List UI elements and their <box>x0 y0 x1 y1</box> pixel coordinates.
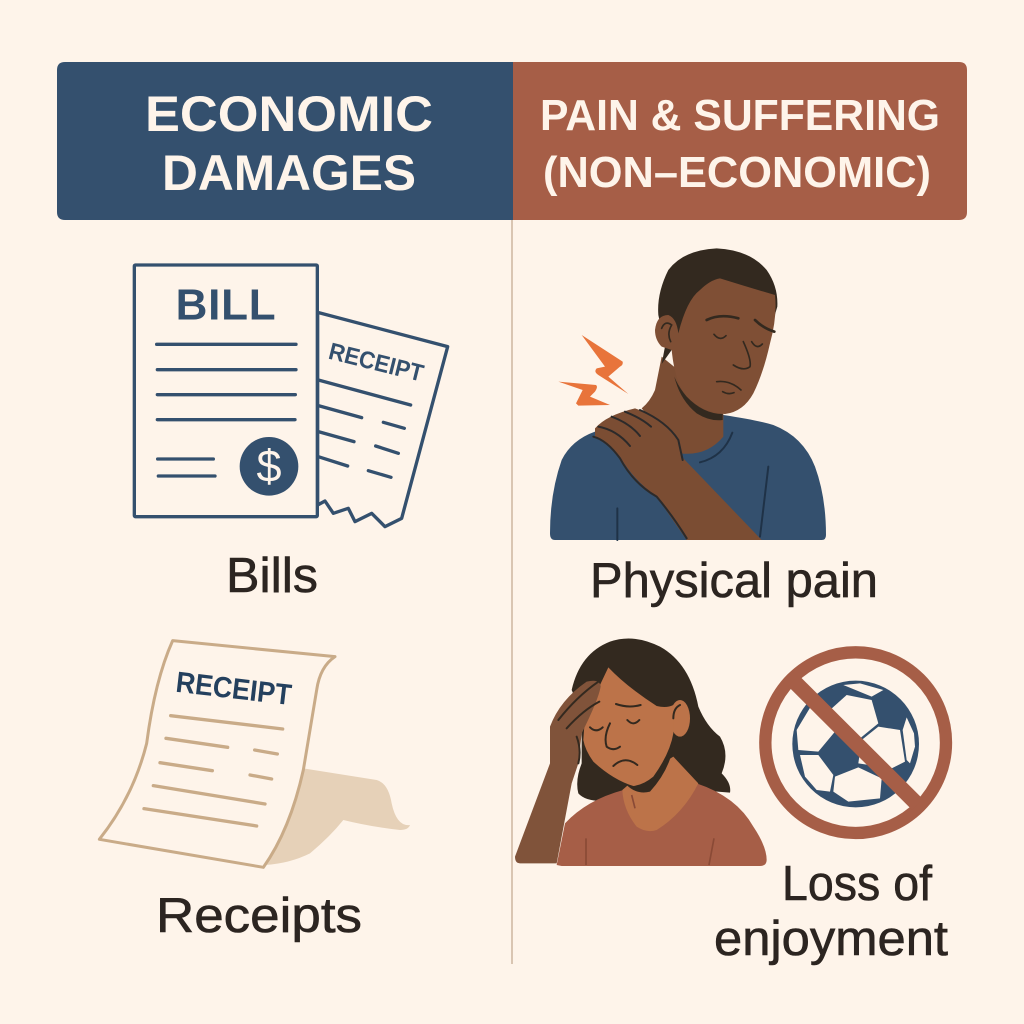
man's chin shadow <box>674 377 723 420</box>
label: physical pain: Physical pain <box>590 554 878 608</box>
woman's features and fingers <box>558 682 680 766</box>
soccer ball <box>792 681 919 807</box>
man's arm and hand <box>595 408 762 540</box>
label: loss of enjoyment: enjoyment <box>714 912 948 966</box>
icon: bill sheet: BILL <box>176 280 276 329</box>
label: bills: Bills <box>226 549 318 603</box>
label: loss of enjoyment <box>714 857 948 966</box>
icon: bill sheet <box>134 265 317 517</box>
label: loss of enjoyment: Loss of <box>782 857 932 911</box>
icon: back receipt <box>318 312 448 527</box>
icon: no soccer ball <box>765 652 946 833</box>
icon: woman with headache <box>515 638 767 866</box>
header: pain and suffering: PAIN & SUFFERING <box>540 91 940 140</box>
woman's shirt lines <box>586 795 714 865</box>
woman's arm and hand <box>515 681 601 863</box>
icon: back receipt: RECEIPT <box>326 338 427 388</box>
receipt title: RECEIPT <box>174 666 293 712</box>
woman's ear <box>670 700 690 737</box>
icon: bill sheet: $ <box>256 441 282 492</box>
woman's face <box>583 667 673 786</box>
man's facial features <box>707 316 774 332</box>
header: pain and suffering <box>513 62 967 220</box>
woman's shirt <box>557 782 767 866</box>
arm outlines and fingers <box>593 410 687 538</box>
man's shirt <box>550 413 826 540</box>
receipt sheet <box>99 641 335 867</box>
icon: pain bolts <box>558 335 628 406</box>
prohibition ring and bar <box>765 652 946 833</box>
label: receipts: Receipts <box>156 889 362 943</box>
header: pain and suffering: (NON–ECONOMIC) <box>543 148 931 197</box>
icon: bill and receipt <box>134 265 448 527</box>
header: economic damages: ECONOMIC <box>145 86 433 142</box>
icon: curled receipt <box>99 641 410 867</box>
icon: man with shoulder pain <box>550 248 826 540</box>
woman's chin shadow <box>627 752 672 792</box>
woman's hair <box>572 638 730 801</box>
man's face <box>655 278 776 414</box>
header: economic damages <box>57 62 513 220</box>
man's collar and shirt lines <box>617 433 768 540</box>
woman's neck <box>622 757 698 831</box>
receipt lines <box>144 716 283 826</box>
receipt curl <box>265 768 410 865</box>
man's neck <box>642 357 723 454</box>
header: economic damages: DAMAGES <box>162 145 416 201</box>
man's hair <box>658 248 777 364</box>
